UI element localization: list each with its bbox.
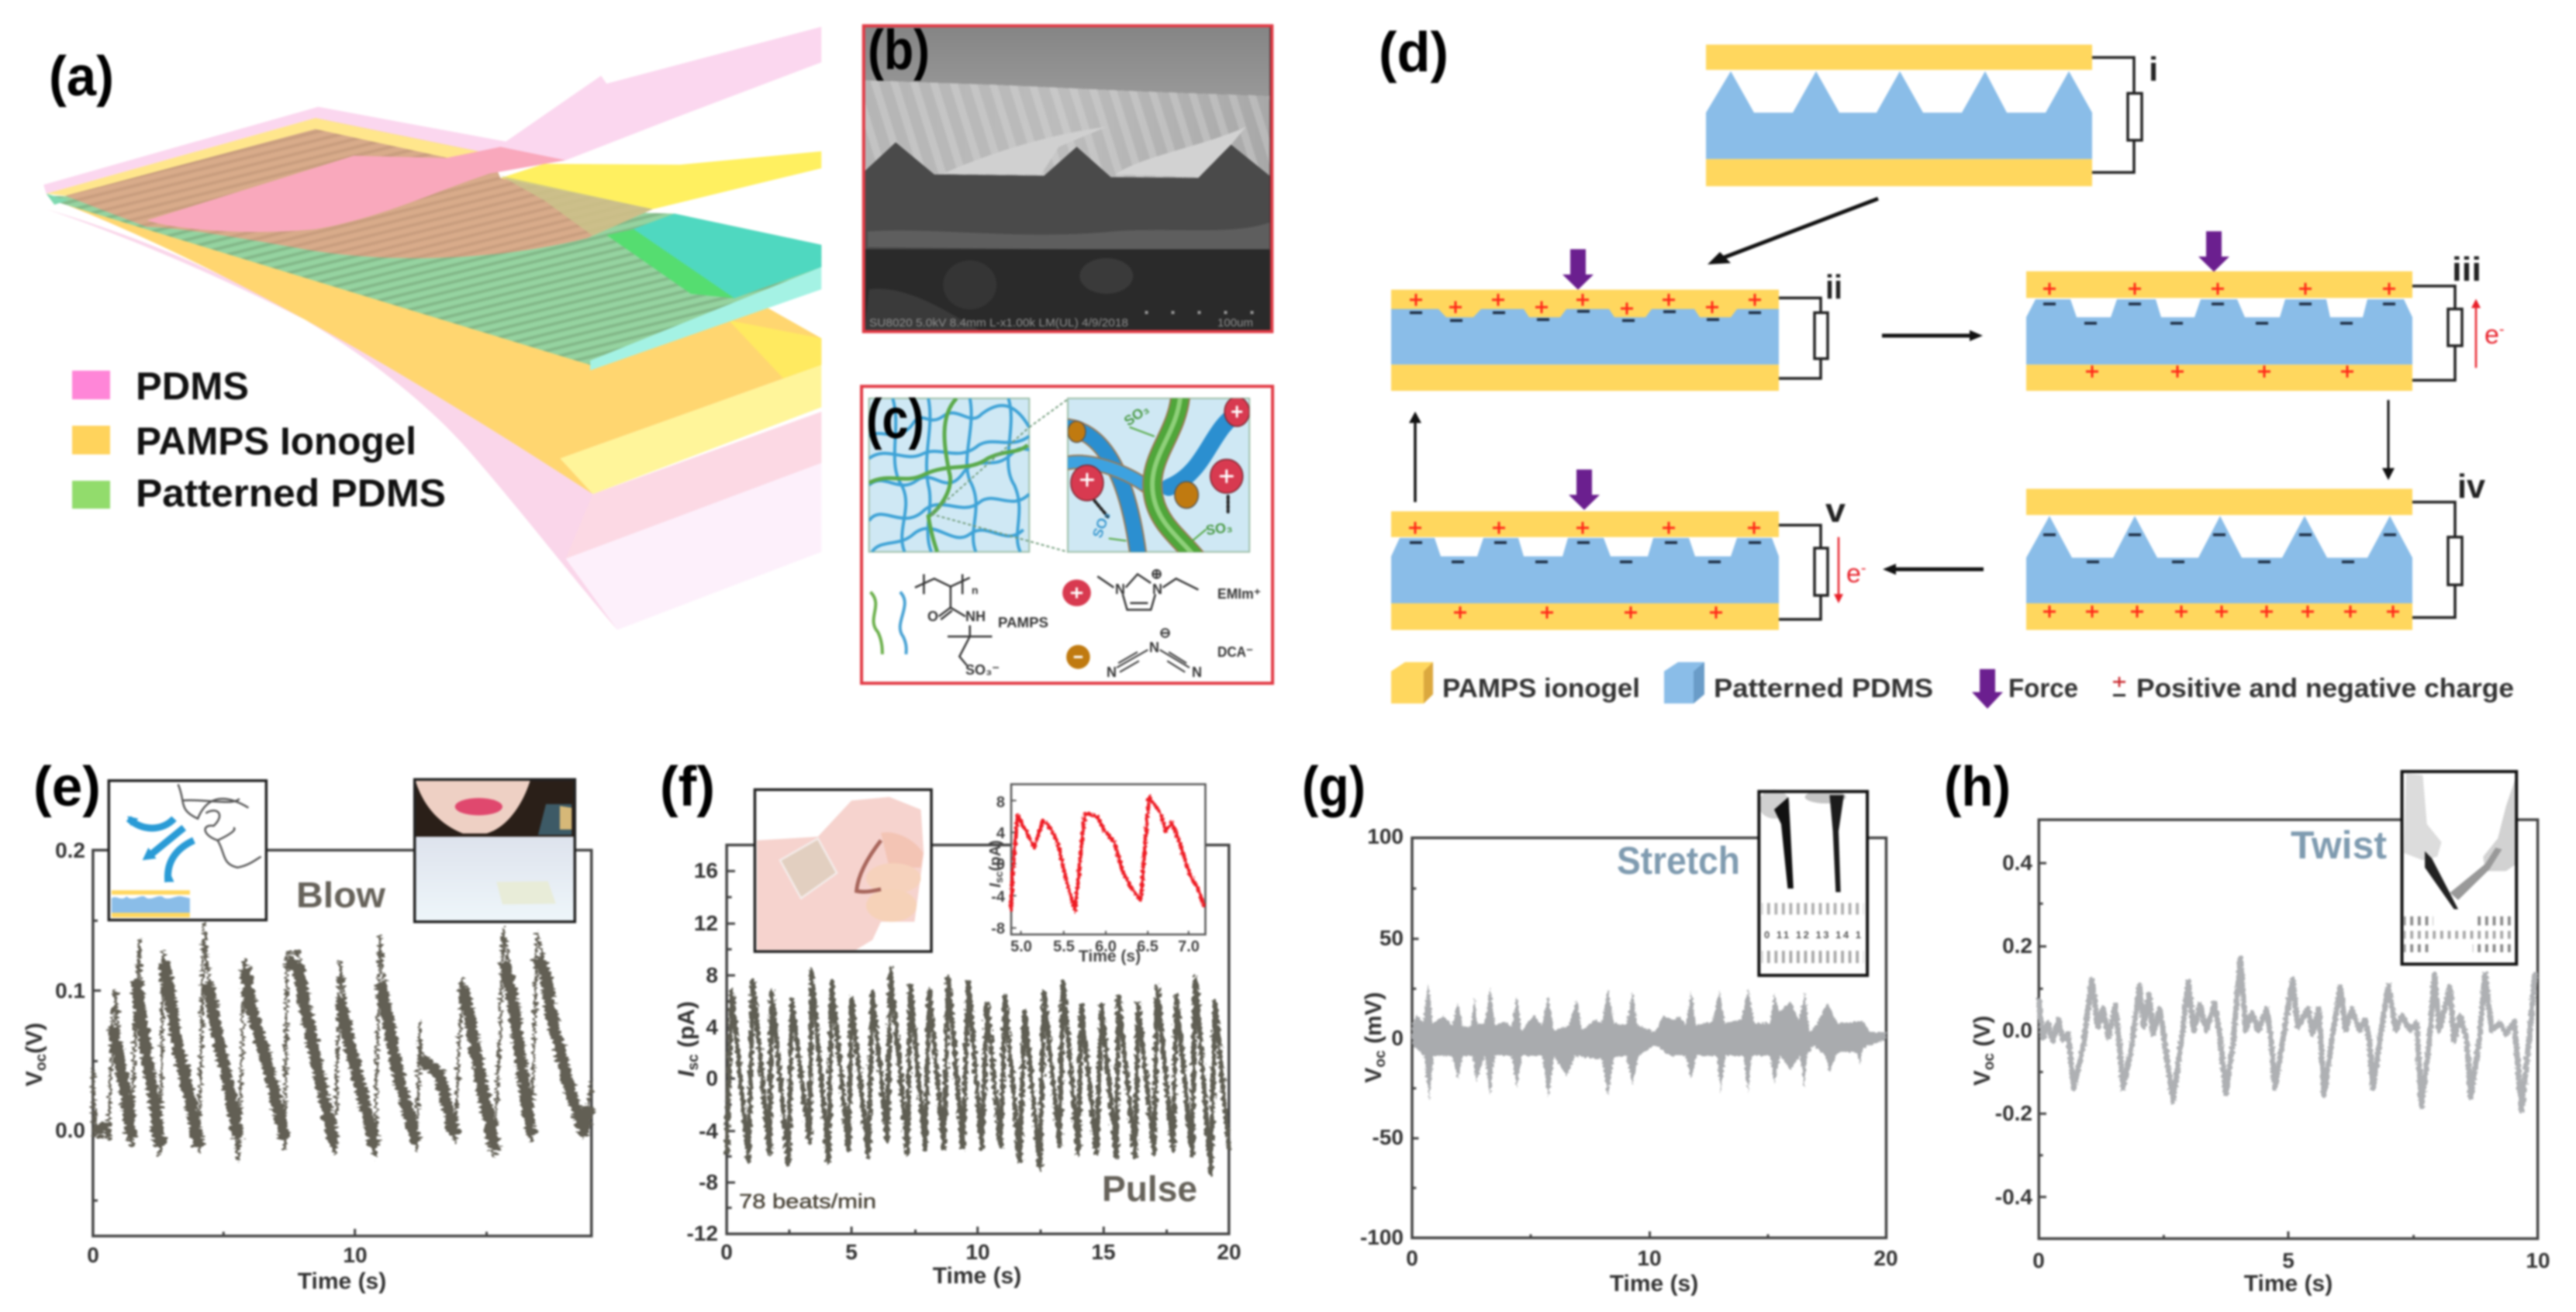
inset: zoomed pulse plot: I (987, 883, 1004, 888)
axis labels: 12 (694, 911, 718, 935)
inset: zoomed pulse plot: 4 (996, 825, 1006, 842)
chemical labels: SO₃ (1089, 509, 1114, 540)
axis labels: 0.0 (2002, 1018, 2032, 1042)
inset: zoomed pulse plot: 6.5 (1137, 938, 1159, 955)
stage numerals: iii (2452, 250, 2481, 288)
stage iii (2026, 231, 2481, 391)
chemical labels: PAMPS (998, 615, 1048, 630)
voltage trace (1412, 983, 1886, 1101)
word Blow: Blow (296, 875, 385, 915)
arrow: iii to iv (2382, 400, 2395, 480)
stage numerals: ii (1825, 268, 1842, 306)
axis labels: 0 (1391, 1026, 1404, 1050)
arrow: i to ii (1708, 199, 1878, 264)
axis labels: 16 (694, 858, 718, 882)
inset: zoomed pulse plot: -4 (991, 889, 1006, 906)
panel d: working mechanism (1379, 22, 2514, 709)
panel h: twist chart (1944, 756, 2550, 1296)
axis labels: oc (1373, 1050, 1389, 1068)
panel c: ionogel network (862, 386, 1272, 683)
stage i (1706, 45, 2142, 186)
panel e: blow chart (22, 756, 592, 1294)
label e: (e) (33, 756, 101, 818)
chemical labels: N (1149, 640, 1159, 655)
axis labels: 0 (720, 1240, 733, 1264)
panel g: stretch chart (1302, 756, 1898, 1296)
inset: zoomed pulse plot: -8 (991, 920, 1005, 937)
beat rate note: 78 beats/min (739, 1189, 876, 1213)
chart frame (727, 845, 1229, 1234)
legend text (1442, 674, 2514, 703)
chemical labels: N (1152, 582, 1162, 597)
axis labels (1360, 824, 1898, 1296)
chart frame (1412, 837, 1886, 1238)
axis labels: 8 (706, 963, 718, 987)
electron labels: e (1846, 559, 1861, 589)
label a: (a) (49, 46, 114, 108)
axis labels: (V) (22, 1023, 47, 1054)
chemical labels: O (927, 609, 938, 624)
axis labels: 0.1 (55, 979, 85, 1003)
label h: (h) (1944, 756, 2011, 818)
inset: twist photo (2402, 772, 2516, 964)
inset: zoomed pulse plot: 5.5 (1053, 938, 1075, 955)
axis labels: 0.2 (2002, 934, 2032, 958)
legend text: Positive and negative charge (2136, 674, 2514, 703)
inset: zoomed pulse plot: 8 (996, 794, 1005, 811)
chemical labels: N (1115, 582, 1125, 597)
inset: stretch photo (1759, 789, 1867, 975)
axis labels: 10 (2526, 1248, 2550, 1272)
network schematics (862, 386, 1272, 683)
stage numerals: v (1825, 492, 1846, 530)
axis labels: Time (s) (933, 1263, 1021, 1289)
inset: zoomed pulse plot: sc (993, 871, 1005, 883)
label b: (b) (868, 19, 930, 81)
axis labels: -50 (1373, 1125, 1404, 1149)
chemical labels: N (1107, 665, 1117, 680)
SEM image (864, 26, 1272, 332)
axis labels: Time (s) (2244, 1271, 2333, 1296)
axis labels: 20 (1873, 1246, 1898, 1270)
inset: stretch photo: 0 11 12 13 14 1 (1764, 929, 1861, 941)
axis labels: -8 (699, 1170, 718, 1194)
word Twist: Twist (2291, 823, 2387, 867)
voltage trace (2039, 958, 2535, 1110)
axis labels: 10 (1637, 1246, 1662, 1270)
panel b: SEM cross section (864, 19, 1272, 332)
stage numerals (1825, 50, 2486, 530)
axis labels: -0.2 (1995, 1101, 2032, 1125)
voltage trace (93, 925, 592, 1161)
axis labels: V (1361, 1068, 1386, 1083)
axis labels: V (1970, 1070, 1995, 1086)
axis labels: Time (s) (1610, 1271, 1698, 1296)
inset: zoomed pulse plot: 7.0 (1178, 938, 1200, 955)
inset: zoomed pulse plot: 6.0 (1095, 938, 1117, 955)
arrow: ii to iii (1882, 330, 1983, 341)
panel a: layered device illustration (43, 26, 821, 630)
legend: PDMS: PDMS (136, 364, 249, 408)
inset: wrist photo (754, 789, 931, 951)
chemical labels: EMIm⁺ (1217, 586, 1261, 602)
axis labels: V (22, 1071, 47, 1086)
chemical labels: SO₃ (1205, 519, 1234, 538)
axis labels: 0.0 (55, 1118, 85, 1142)
inset: zoomed pulse plot: (pA) (987, 840, 1004, 871)
axis labels: oc (1981, 1053, 1998, 1070)
axis labels: 5 (845, 1240, 858, 1264)
axis labels: (pA) (674, 1001, 699, 1054)
inset: zoomed pulse plot: 5.0 (1010, 938, 1032, 955)
chemical labels: DCA⁻ (1217, 644, 1253, 660)
axis labels: 10 (343, 1243, 368, 1267)
axis labels: sc (685, 1054, 702, 1071)
legend: PAMPS Ionogel: PAMPS Ionogel (136, 419, 416, 463)
legend text: Patterned PDMS (1714, 674, 1933, 703)
axis labels (22, 838, 386, 1294)
arrow: v to ii (1409, 412, 1421, 502)
axis labels: oc (33, 1053, 50, 1071)
axis labels: -0.4 (1995, 1185, 2032, 1209)
label g: (g) (1302, 756, 1366, 818)
chemical labels: ⊖ (1159, 625, 1171, 640)
axis labels: 5 (2282, 1248, 2295, 1272)
stage numerals: i (2149, 50, 2158, 88)
chart frame (2039, 820, 2538, 1238)
axis labels: (mV) (1361, 992, 1386, 1050)
label c: (c) (866, 388, 924, 451)
arrow: iv to v (1883, 564, 1984, 575)
axis labels: 20 (1217, 1240, 1241, 1264)
axis labels: I (674, 1070, 699, 1077)
axis labels: -100 (1360, 1225, 1404, 1249)
stage numerals: iv (2457, 468, 2486, 506)
axis labels: 0.4 (2002, 851, 2032, 875)
legend: PDMS (72, 364, 249, 408)
axis labels (1970, 851, 2550, 1296)
illustration: exploded sensor layers (43, 26, 821, 630)
chemical labels: SO₃ (1121, 401, 1152, 429)
axis labels: 10 (965, 1240, 990, 1264)
axis labels: 4 (706, 1015, 718, 1039)
inset: zoomed pulse plot (987, 784, 1205, 965)
axis labels: 0 (1406, 1246, 1418, 1270)
label d: (d) (1379, 22, 1449, 84)
legend text: Force (2008, 674, 2078, 703)
panel f: pulse chart (660, 756, 1241, 1289)
stage v (1391, 469, 1843, 630)
stage iv (2026, 489, 2462, 630)
axis labels: 100 (1367, 824, 1404, 848)
stage ii (1391, 249, 1828, 391)
current trace (727, 968, 1229, 1173)
axis labels: -12 (687, 1221, 718, 1245)
electron labels: e (2484, 320, 2499, 350)
axis labels: 0 (87, 1243, 99, 1267)
legend: Patterned PDMS: Patterned PDMS (136, 471, 446, 515)
inset: zoomed pulse plot: 0 (996, 856, 1005, 873)
axis labels: -4 (699, 1119, 718, 1143)
axis labels: 0 (2032, 1248, 2045, 1272)
inset: blowing schematic (109, 781, 266, 920)
word Stretch: Stretch (1617, 839, 1740, 882)
legend cubes and force arrow (1391, 662, 2125, 709)
electron labels (1846, 320, 2505, 589)
chart frame (93, 850, 592, 1236)
chemical labels: ⊕ (1151, 566, 1162, 582)
label f: (f) (660, 756, 715, 818)
axis labels: Time (s) (298, 1269, 386, 1294)
SEM scale: 100um (1217, 316, 1253, 330)
mechanism stages (1391, 45, 2481, 709)
electron labels: - (1861, 560, 1866, 577)
axis labels (674, 858, 1241, 1289)
chemical labels: SO₃⁻ (965, 662, 1000, 678)
inset: blowing photo (415, 779, 575, 922)
axis labels: 50 (1380, 926, 1404, 950)
chemical labels: NH (965, 609, 986, 624)
axis labels: (V) (1970, 1016, 1995, 1053)
SEM caption: SU8020 5.0kV 8.4mm L-x1.00k LM(UL) 4/9/2018 (869, 316, 1128, 330)
axis labels: 15 (1091, 1240, 1116, 1264)
chemical labels (927, 401, 1261, 680)
axis labels: 0.2 (55, 838, 85, 862)
word Pulse: Pulse (1102, 1169, 1197, 1209)
inset: zoomed pulse plot: Time (s) (1079, 948, 1141, 965)
chemical labels: N (1192, 665, 1202, 680)
axis labels: 0 (706, 1066, 718, 1090)
electron labels: - (2499, 321, 2505, 338)
chemical labels: n (972, 584, 979, 596)
legend text: PAMPS ionogel (1442, 674, 1640, 703)
